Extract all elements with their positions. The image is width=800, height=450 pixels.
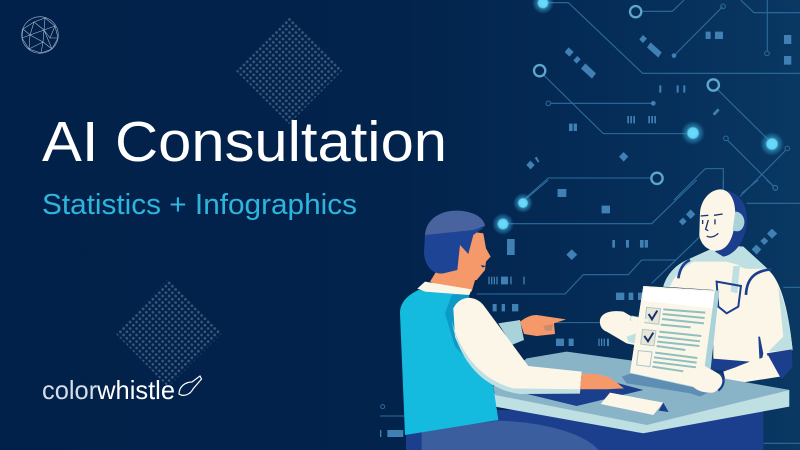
man far arm and pointing hand [498,320,524,345]
checklist lines [652,309,705,371]
man hand on desk [580,374,624,389]
man vest [400,290,498,435]
desk [495,410,763,450]
icon: wireframe globe [22,17,58,53]
man pants [406,421,598,450]
man head [438,230,491,282]
robot arm pointing [600,311,643,347]
robot holding hand [688,363,723,393]
clipboard base [622,373,713,397]
dotted diamond top [235,17,343,124]
dotted diamond bottom [115,279,222,387]
man arm [453,298,582,393]
icon: whistle [179,376,202,395]
robot body [663,245,793,367]
glowing nodes lower [492,193,533,235]
robot [663,189,793,385]
illustration: man and robot at desk [400,189,793,450]
man hair [424,227,484,274]
robot finger on document [632,317,648,322]
circuit traces upper right [523,0,800,200]
robot forearm [723,356,780,385]
checkbox 2 [641,329,656,346]
robot pocket [717,282,741,313]
man [400,211,624,450]
name plate [601,393,663,415]
title: AI Consultation [42,110,447,174]
robot head [715,190,747,257]
subtitle: Statistics + Infographics [42,189,357,221]
man neck and collar [430,260,480,292]
checkbox 1 [645,307,661,324]
circuit rings [534,6,719,184]
checkbox 3 [637,351,652,367]
glowing nodes upper [532,0,784,156]
circuit traces lower [380,180,800,443]
logo: colorwhistle: colorwhistle [42,375,175,405]
document [630,286,719,391]
